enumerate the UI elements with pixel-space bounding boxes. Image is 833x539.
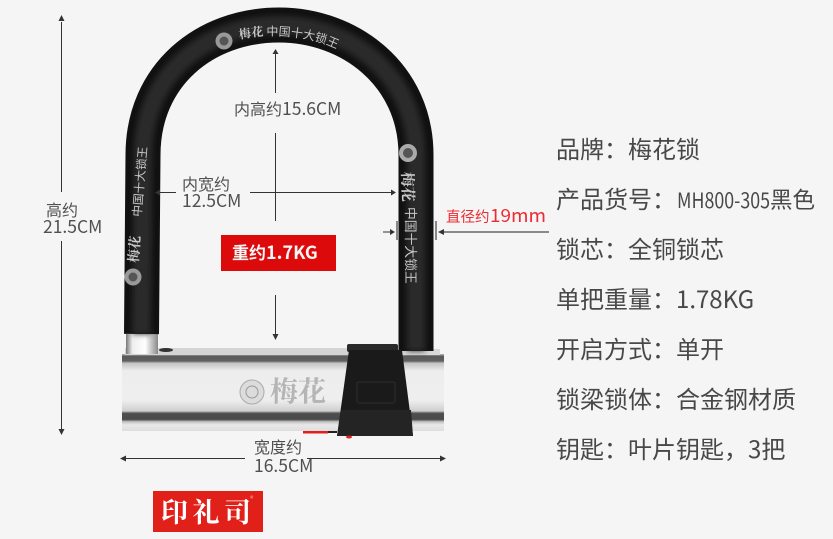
spec: model bbox=[556, 180, 815, 215]
spec: opening: 开启方式：单开 bbox=[556, 330, 724, 365]
shackle bbox=[124, 8, 434, 356]
label: inner height: 内高约15.6CM bbox=[234, 96, 341, 121]
lock body logo: 梅花 bbox=[270, 370, 326, 410]
arrow: overall height bbox=[58, 15, 64, 435]
label: inner width bbox=[182, 171, 241, 213]
weight badge: 重约1.7KG bbox=[232, 239, 318, 265]
shackle engraving: right: 梅花 bbox=[400, 172, 416, 202]
spec: model: MH800-305 bbox=[677, 185, 770, 215]
shackle engraving: right: 中国十大锁王 bbox=[404, 208, 418, 284]
black clamp bbox=[303, 344, 413, 438]
lock body logo bbox=[240, 370, 326, 410]
label: overall width: 16.5CM bbox=[254, 453, 313, 478]
label: overall width: 宽度约 bbox=[254, 434, 302, 458]
arrow: inner height line bbox=[274, 133, 276, 221]
spec: model: 黑色 bbox=[770, 183, 815, 215]
keyhole slot bbox=[159, 348, 173, 352]
shackle engraving: left: 中国十大锁王 bbox=[132, 148, 148, 216]
label: diameter: 19mm bbox=[490, 202, 546, 228]
spec: weight: 单把重量：1.78KG bbox=[556, 280, 754, 315]
label: inner width: 内宽约 bbox=[182, 171, 230, 195]
arrow: inner height down bbox=[272, 295, 278, 340]
arrow: diameter left bbox=[383, 229, 395, 235]
brand stamp: ® bbox=[250, 494, 254, 504]
shackle engraving: top: 梅花 中国十大锁王 bbox=[238, 26, 340, 49]
arrow: inner height up bbox=[272, 49, 278, 93]
spec: model: 产品货号： bbox=[556, 180, 676, 215]
spec: keys: 钥匙：叶片钥匙，3把 bbox=[556, 430, 785, 465]
shackle engraving: top bbox=[216, 26, 340, 50]
diameter ticks bbox=[396, 221, 437, 240]
label: overall height: 21.5CM bbox=[43, 214, 102, 239]
arrow: inner width right bbox=[250, 190, 396, 196]
label: overall width bbox=[254, 434, 313, 478]
arrow: overall width bbox=[120, 456, 446, 462]
shackle engraving: left bbox=[124, 148, 148, 286]
arrow: diameter right bbox=[438, 229, 549, 235]
label: diameter bbox=[446, 202, 546, 228]
spec: core: 锁芯：全铜锁芯 bbox=[556, 230, 724, 265]
lock post bbox=[126, 334, 158, 354]
weight badge bbox=[221, 235, 336, 271]
label: diameter: 直径约 bbox=[446, 206, 490, 227]
spec list bbox=[556, 130, 815, 465]
label: overall height: 高约 bbox=[46, 197, 78, 221]
label: overall height bbox=[43, 197, 102, 239]
lock body bbox=[122, 348, 444, 431]
spec: brand: 品牌：梅花锁 bbox=[556, 130, 700, 165]
brand stamp: 印礼司 bbox=[161, 491, 251, 530]
arrow: inner width left bbox=[155, 190, 176, 196]
shackle engraving: left: 梅花 bbox=[126, 236, 141, 263]
shackle engraving: right bbox=[399, 144, 418, 284]
label: inner width: 12.5CM bbox=[182, 188, 241, 213]
spec: material: 锁梁锁体：合金钢材质 bbox=[556, 380, 796, 415]
